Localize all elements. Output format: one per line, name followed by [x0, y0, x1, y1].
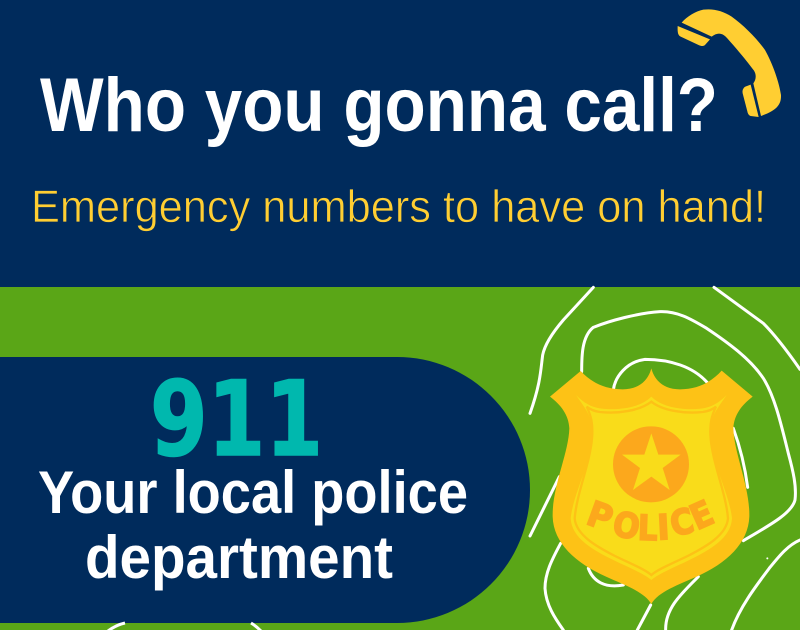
badge wording: P: [582, 493, 618, 539]
badge wording: I: [656, 507, 671, 548]
icon: police badge: [550, 368, 753, 604]
callout label: Your local police: [38, 459, 468, 526]
callout label: [38, 459, 468, 591]
callout label: department: [85, 524, 393, 591]
badge wording: E: [684, 492, 720, 538]
badge wording: [582, 492, 720, 549]
title: Who you gonna call?: [40, 63, 718, 148]
icon: telephone handset: [678, 9, 781, 117]
emblem circle with star: [613, 426, 689, 502]
badge wording: L: [637, 507, 658, 549]
badge wording: C: [666, 500, 698, 545]
panel: 911 callout: [0, 357, 530, 623]
panel: header: [0, 0, 800, 287]
emergency number: 911: [150, 360, 323, 480]
decorative contour lines: [530, 287, 800, 630]
contour fragments below callout: [108, 623, 261, 630]
subtitle: Emergency numbers to have on hand!: [31, 181, 766, 232]
badge wording: O: [609, 503, 644, 548]
